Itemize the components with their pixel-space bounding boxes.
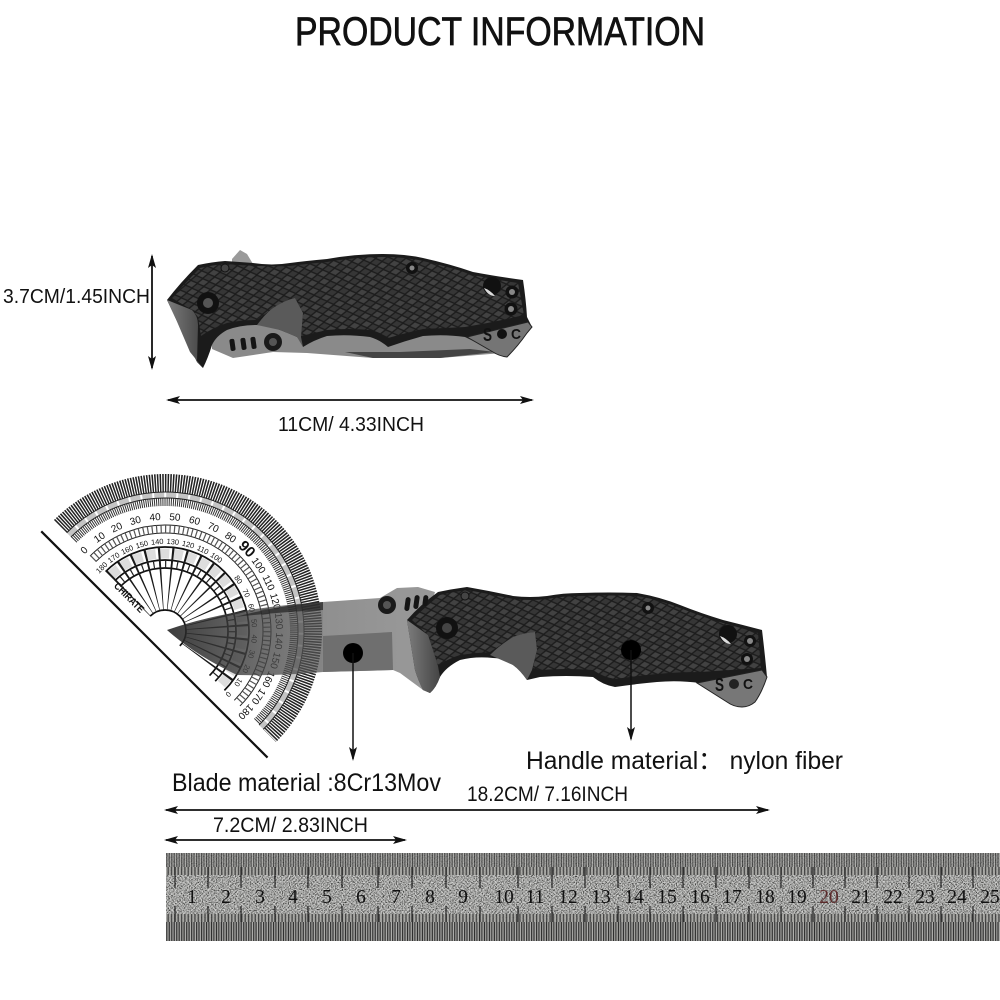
brand mark: CHIRATE [111, 581, 146, 616]
blade dark edge band [345, 349, 495, 358]
inner degree numbers: 180 [94, 560, 109, 575]
ruler numbers: 7 [391, 887, 401, 908]
mid screw [406, 262, 418, 274]
rear screw bottom [741, 653, 753, 665]
inner degree numbers: 50 [249, 619, 259, 628]
top graduations [166, 853, 1000, 867]
overall length arrow [166, 809, 768, 811]
lanyard hole [719, 625, 737, 644]
ruler numbers: 21 [851, 887, 871, 908]
blade length arrow [166, 839, 405, 841]
outer degree numbers: 40 [149, 512, 162, 524]
pocket clip [697, 670, 767, 707]
outer degree numbers: 10 [92, 530, 108, 546]
outer degree numbers: 100 [249, 556, 268, 576]
textured grip [172, 257, 524, 338]
outer degree numbers: 180 [235, 701, 255, 721]
box shading [110, 521, 275, 686]
closed blade [212, 320, 503, 358]
ruler numbers: 9 [458, 887, 468, 908]
clip hole [729, 679, 739, 689]
open knife photo [167, 587, 767, 707]
blade length label: 7.2CM/ 2.83INCH [213, 814, 368, 837]
blade screw [264, 333, 282, 351]
ruler numbers: 10 [494, 887, 514, 908]
mid ladder ring [93, 487, 309, 703]
inner degree numbers: 140 [151, 537, 164, 547]
inner degree numbers: 100 [209, 550, 224, 565]
ruler numbers: 1 [187, 887, 197, 908]
outer degree numbers: 90 [235, 537, 259, 561]
short ladder ticks [118, 536, 260, 678]
blade callout dot and arrow [343, 643, 363, 759]
outer degree numbers: 170 [248, 686, 267, 706]
outer degree numbers: 110 [260, 573, 276, 593]
clip letter C: C [743, 676, 753, 693]
ruler numbers: 14 [624, 887, 644, 908]
blade screw [378, 596, 396, 614]
thumb slots [229, 337, 257, 351]
rear screw bottom [504, 302, 518, 316]
SOC clip lettering: S [715, 675, 724, 695]
thumb ramp [257, 298, 303, 347]
handle material label: Handle material： nylon fiber [526, 747, 843, 775]
handle outline [407, 587, 767, 707]
ruler numbers: 22 [883, 887, 903, 908]
outer degree numbers: 150 [267, 651, 282, 670]
outer degree numbers [75, 459, 337, 721]
bottom graduations [166, 922, 1000, 941]
blade tip above the handle [232, 250, 253, 264]
ruler numbers: 13 [591, 887, 611, 908]
lanyard hole [483, 277, 501, 296]
small screw [221, 264, 229, 272]
ladder ring [69, 439, 357, 727]
outer degree numbers: 20 [110, 521, 125, 535]
base edge [41, 531, 268, 758]
ruler noise texture [166, 853, 1000, 941]
blade material label: Blade material :8Cr13Mov [172, 769, 441, 797]
title: PRODUCT INFORMATION [295, 10, 705, 54]
ruler body [166, 853, 1000, 941]
outer degree numbers: 140 [272, 632, 284, 650]
outer degree numbers: 60 [188, 515, 202, 528]
inner degree numbers: 70 [240, 587, 252, 599]
steel ruler [166, 853, 1000, 941]
clip letter C: C [511, 326, 521, 343]
inner degree numbers: 170 [106, 550, 121, 565]
ring outlines [67, 434, 362, 729]
mid screw [642, 602, 654, 614]
ruler numbers: 20 [819, 887, 839, 908]
inner degree numbers: 130 [166, 537, 179, 547]
height label: 3.7CM/1.45INCH [3, 286, 150, 308]
closed length label: 11CM/ 4.33INCH [278, 414, 424, 436]
inner degree numbers: 150 [135, 539, 149, 551]
ruler numbers: 3 [255, 887, 265, 908]
blade flat grind [323, 632, 393, 672]
inner degree numbers: 40 [249, 634, 259, 643]
outer degree numbers: 70 [206, 521, 221, 536]
pivot screw [436, 617, 458, 639]
outer degree numbers: 160 [259, 669, 276, 689]
inner degree numbers: 160 [120, 543, 135, 557]
outer tick band [60, 422, 374, 736]
textured grip [412, 590, 761, 679]
ruler numbers: 6 [356, 887, 366, 908]
front bolster scale [167, 300, 203, 368]
pivot screw [197, 292, 219, 314]
SOC clip lettering: S [483, 325, 492, 345]
ruler numbers: 2 [221, 887, 231, 908]
front scale [407, 620, 440, 693]
small screw [461, 592, 469, 600]
open blade [167, 587, 435, 690]
ruler numbers: 11 [526, 887, 544, 908]
inner rings [106, 512, 284, 690]
outer degree numbers: 120 [267, 592, 282, 612]
ruler numbers: 5 [322, 887, 332, 908]
inner tick band [74, 449, 347, 722]
dark spine sliver [235, 602, 323, 617]
centimetre ticks [175, 867, 973, 922]
outer degree numbers: 80 [222, 530, 238, 546]
inner degree numbers: 80 [232, 574, 244, 586]
inner degree numbers: 110 [195, 543, 210, 556]
ruler numbers: 18 [755, 887, 775, 908]
ruler numbers: 4 [288, 887, 298, 908]
inner degree numbers: 60 [246, 603, 257, 613]
overall length label: 18.2CM/ 7.16INCH [467, 783, 628, 806]
rear screw top [506, 286, 518, 298]
outer degree numbers: 30 [129, 515, 143, 528]
protractor body [41, 406, 393, 758]
inner degree numbers: 10 [232, 676, 244, 688]
closed length arrow [168, 399, 532, 401]
upper mm ticks [166, 867, 1000, 875]
lower mm ticks [166, 914, 1000, 922]
ruler numbers: 24 [947, 887, 967, 908]
inner degree numbers: 0 [224, 690, 233, 699]
inner degree numbers: 30 [246, 649, 257, 659]
clip hole [497, 329, 507, 339]
height dimension arrow [151, 256, 153, 368]
handle callout dot and arrow [621, 640, 641, 739]
outer degree numbers: 130 [272, 612, 284, 630]
ruler numbers [187, 887, 1000, 908]
outer degree numbers: 50 [169, 512, 181, 524]
outer degree numbers: 0 [79, 545, 91, 557]
ruler numbers: 25 [980, 887, 1000, 908]
closed knife photo [167, 250, 532, 368]
thumb ramp [490, 632, 537, 680]
pocket clip [467, 322, 532, 357]
ruler numbers: 23 [915, 887, 935, 908]
rear screw top [744, 635, 756, 647]
protractor [41, 406, 393, 758]
ruler numbers: 12 [558, 887, 578, 908]
thumb slots [404, 595, 429, 611]
inner degree numbers: 120 [181, 539, 195, 551]
radial spokes [128, 557, 239, 668]
inner degree numbers: 20 [240, 663, 252, 675]
inner degree numbers [94, 498, 298, 702]
ruler numbers: 16 [690, 887, 710, 908]
handle outline [167, 254, 532, 368]
ruler numbers: 15 [657, 887, 677, 908]
ruler numbers: 17 [722, 887, 742, 908]
ruler numbers: 19 [787, 887, 807, 908]
ruler numbers: 8 [425, 887, 435, 908]
